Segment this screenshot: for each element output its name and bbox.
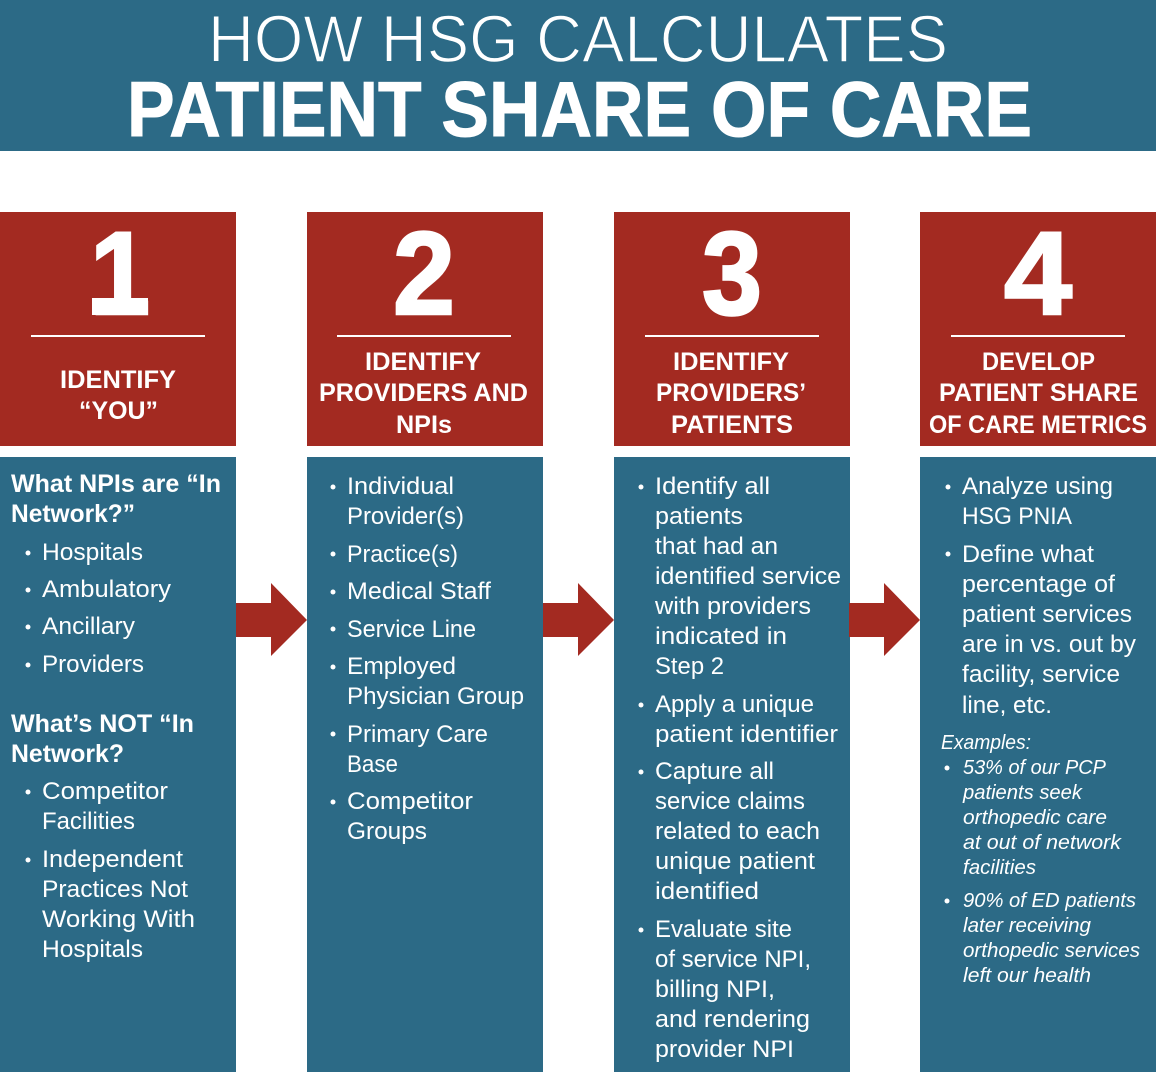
step 4 body: percentage of bbox=[962, 571, 1115, 598]
examples bbox=[941, 732, 1140, 987]
step 1 body: Hospitals bbox=[42, 539, 143, 566]
step 1 body: Working With bbox=[42, 906, 195, 933]
arrow: step 3 to 4 bbox=[849, 583, 920, 656]
examples: patients seek bbox=[962, 782, 1083, 804]
step 1 body: What’s NOT “In bbox=[11, 710, 194, 738]
arrow: step 2 to 3 bbox=[543, 583, 614, 656]
panel: step 4 develop patient share of care metrics bbox=[920, 208, 1156, 1072]
step 2 body: Employed bbox=[347, 653, 456, 680]
step 3 body: provider NPI bbox=[655, 1036, 794, 1063]
examples: at out of network bbox=[963, 832, 1122, 854]
step 3 header: 3 bbox=[702, 208, 762, 340]
examples: facilities bbox=[963, 857, 1036, 879]
step 4 body: HSG PNIA bbox=[962, 503, 1072, 530]
step 3 body: Identify all bbox=[655, 473, 770, 500]
step 4 header: OF CARE METRICS bbox=[929, 411, 1147, 439]
step 2 body: Medical Staff bbox=[347, 578, 491, 605]
step 3 header: PATIENTS bbox=[671, 411, 793, 439]
step 3 body: billing NPI, bbox=[655, 976, 775, 1003]
step 4 header bbox=[920, 208, 1156, 446]
step 3 body: service claims bbox=[655, 788, 805, 815]
step 1 body: Facilities bbox=[42, 808, 135, 835]
step 3 body: of service NPI, bbox=[655, 946, 811, 973]
step 3 body: identified bbox=[655, 878, 759, 905]
step 3 body: Evaluate site bbox=[655, 916, 792, 943]
step 2 body: Service Line bbox=[347, 616, 476, 643]
examples: later receiving bbox=[963, 915, 1091, 937]
examples: 53% of our PCP bbox=[963, 757, 1107, 779]
title banner: HOW HSG CALCULATES bbox=[208, 2, 948, 77]
panel: step 2 identify providers and NPIs bbox=[307, 208, 543, 1072]
step 3 body bbox=[614, 457, 850, 1072]
step 3 body: and rendering bbox=[655, 1006, 810, 1033]
step 3 header: PROVIDERS’ bbox=[656, 379, 806, 407]
step 2 header: IDENTIFY bbox=[365, 348, 481, 376]
step 1 body: Ancillary bbox=[42, 613, 135, 640]
step 4 body: are in vs. out by bbox=[962, 631, 1136, 658]
step 2 header bbox=[307, 208, 543, 446]
step 1 body: Network?” bbox=[11, 500, 135, 528]
step 4 header: 4 bbox=[1004, 208, 1072, 340]
step 1 body: Ambulatory bbox=[42, 576, 171, 603]
step 4 body: patient services bbox=[962, 601, 1132, 628]
step 1 body: Providers bbox=[42, 651, 144, 678]
step 1 body: Network? bbox=[11, 740, 124, 768]
step 4 body: Analyze using bbox=[962, 473, 1113, 500]
panel: step 3 identify providers' patients bbox=[614, 208, 850, 1072]
step 2 body: Individual bbox=[347, 473, 454, 500]
step 3 body: Capture all bbox=[655, 758, 774, 785]
step 1 header: IDENTIFY bbox=[60, 366, 176, 394]
step 2 body: Practice(s) bbox=[347, 541, 458, 568]
step 2 header: 2 bbox=[393, 208, 455, 340]
step 1 body: Practices Not bbox=[42, 876, 188, 903]
step 2 body bbox=[307, 457, 543, 1072]
step 3 header bbox=[614, 208, 850, 446]
step 1 body bbox=[0, 457, 236, 1072]
arrow: step 1 to 2 bbox=[236, 583, 307, 656]
step 1 header: 1 bbox=[90, 208, 150, 340]
step 1 header bbox=[0, 208, 236, 446]
title banner: PATIENT SHARE OF CARE bbox=[127, 65, 1032, 153]
examples: left our health bbox=[963, 965, 1091, 987]
step 2 header: NPIs bbox=[396, 411, 452, 439]
step 3 header: IDENTIFY bbox=[673, 348, 789, 376]
examples: orthopedic services bbox=[963, 940, 1140, 962]
title banner bbox=[0, 0, 1156, 153]
step 4 header: PATIENT SHARE bbox=[939, 379, 1138, 407]
step 4 body bbox=[920, 457, 1156, 1072]
step 2 body: Base bbox=[347, 751, 398, 778]
step 1 header: “YOU” bbox=[79, 397, 158, 425]
panel: step 1 identify you bbox=[0, 208, 236, 1072]
step 3 body: unique patient bbox=[655, 848, 815, 875]
step 4 header: DEVELOP bbox=[982, 348, 1095, 376]
step 3 body: that had an bbox=[655, 533, 778, 560]
examples: orthopedic care bbox=[963, 807, 1107, 829]
step 3 body: with providers bbox=[654, 593, 811, 620]
step 2 header: PROVIDERS AND bbox=[319, 379, 528, 407]
step 3 body: identified service bbox=[655, 563, 841, 590]
step 3 body: related to each bbox=[655, 818, 820, 845]
step 1 body: What NPIs are “In bbox=[11, 470, 221, 498]
step 3 body: patients bbox=[655, 503, 743, 530]
step 3 body: indicated in bbox=[655, 623, 787, 650]
step 4 body: facility, service bbox=[962, 661, 1120, 688]
step 4 body: Define what bbox=[962, 541, 1094, 568]
examples: 90% of ED patients bbox=[963, 890, 1136, 912]
examples: Examples: bbox=[941, 732, 1031, 754]
step 3 body: Apply a unique bbox=[655, 691, 814, 718]
step 2 body: Provider(s) bbox=[347, 503, 464, 530]
step 2 body: Physician Group bbox=[347, 683, 524, 710]
step 2 body: Groups bbox=[347, 818, 427, 845]
step 1 body: Hospitals bbox=[42, 936, 143, 963]
step 1 body: Competitor bbox=[42, 778, 168, 805]
step 2 body: Competitor bbox=[347, 788, 473, 815]
step 4 body: line, etc. bbox=[962, 692, 1052, 719]
step 2 body: Primary Care bbox=[347, 721, 488, 748]
step 1 body: Independent bbox=[42, 846, 183, 873]
step 3 body: Step 2 bbox=[655, 653, 724, 680]
step 3 body: patient identifier bbox=[655, 721, 838, 748]
